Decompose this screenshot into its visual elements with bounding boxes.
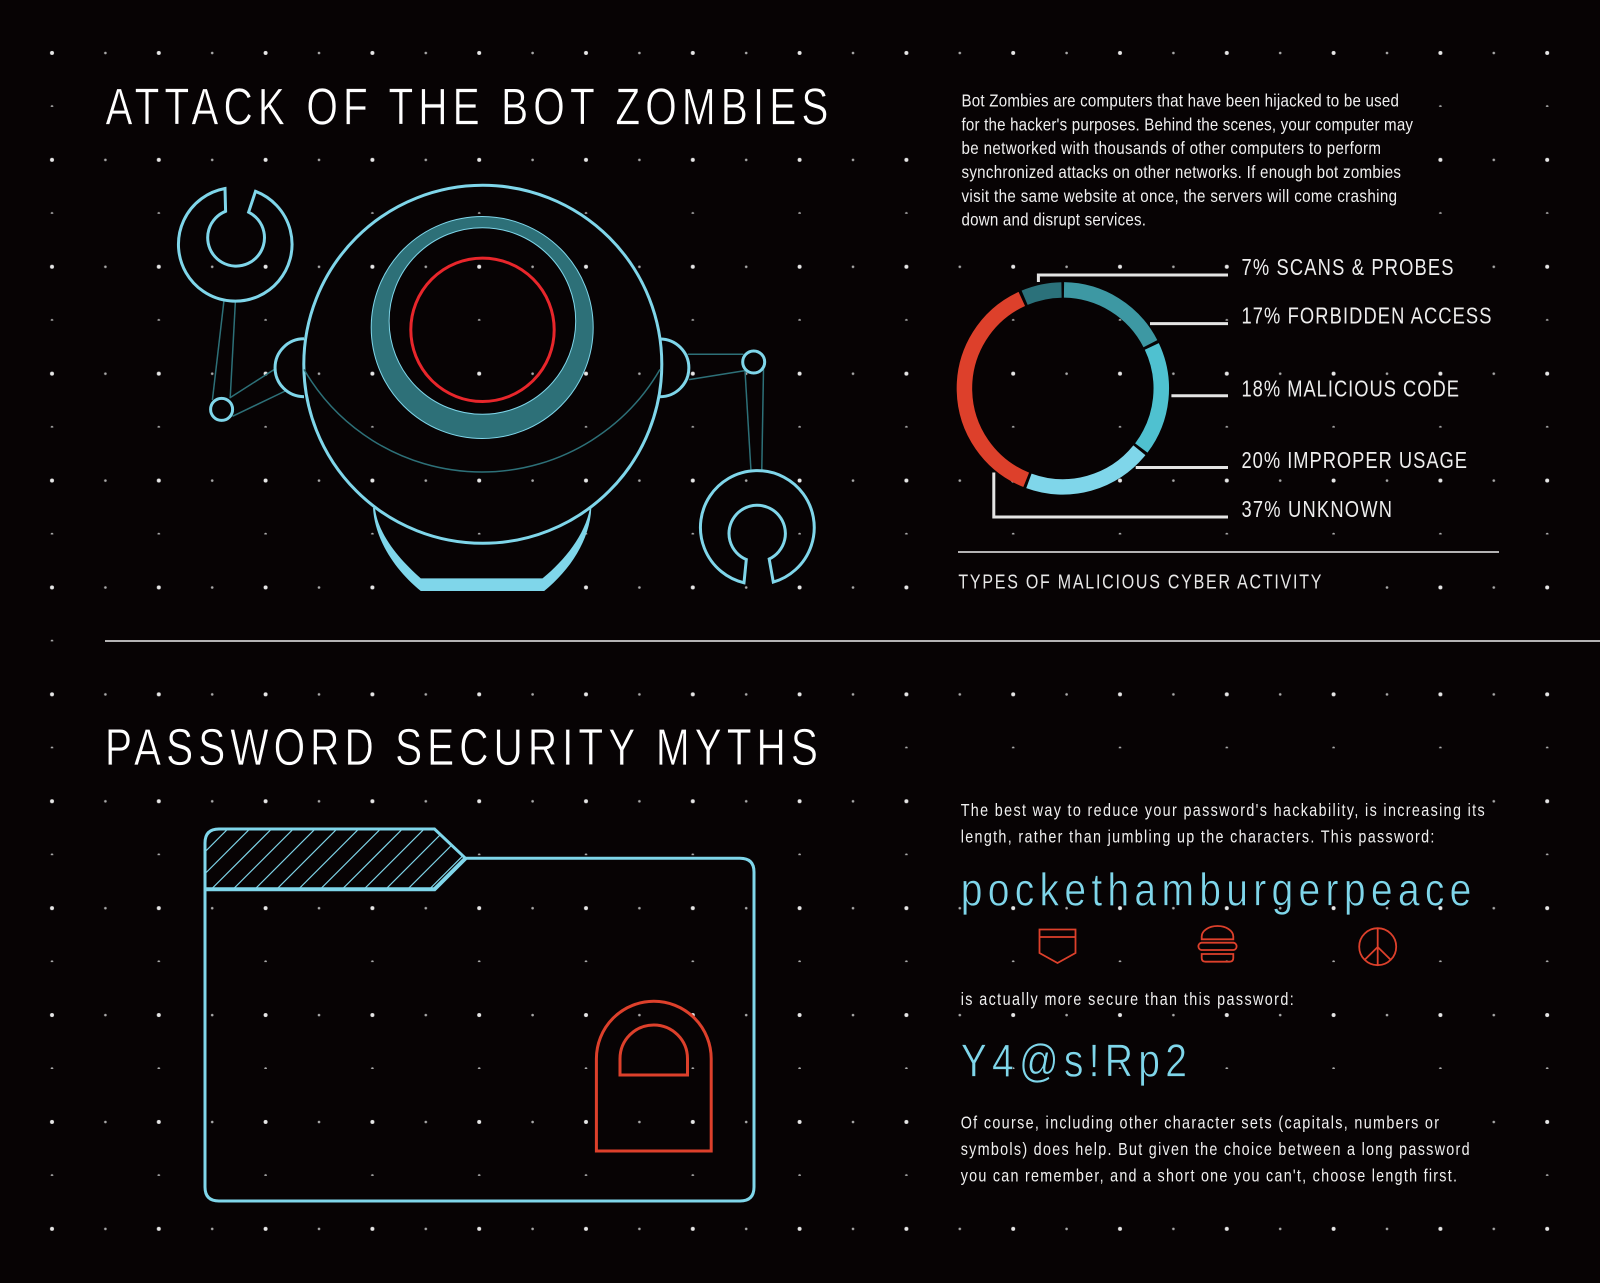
text: reduce hackability: length, rather than jumbling up the characters. This password: — [961, 828, 1434, 847]
left ear — [275, 339, 304, 397]
top-left claw — [178, 188, 292, 301]
donut chart: types of malicious cyber activity — [964, 290, 1161, 487]
head outline — [304, 185, 662, 543]
title: attack of the bot zombies: ATTACK OF THE BOT ZOMBIES — [106, 78, 828, 136]
segment: 18% malicious code — [1141, 346, 1161, 448]
segment: 37% unknown — [964, 299, 1026, 480]
text: choose length first: symbols) does help. But given the choice between a long password — [961, 1141, 1470, 1159]
illustration: folder with lock — [168, 829, 754, 1201]
bottom-right claw — [700, 471, 814, 583]
text: choose length first: you can remember, and a short one you can't, choose length first. — [961, 1167, 1457, 1186]
short password: Y4@s!Rp2 — [961, 1036, 1187, 1087]
chart labels: 17% FORBIDDEN ACCESS — [1242, 304, 1491, 329]
icons row — [1040, 926, 1396, 965]
chart labels: 7% SCANS & PROBES — [1242, 255, 1454, 281]
description: bot zombies: synchronized attacks on other networks. If enough bot zombies — [962, 162, 1401, 182]
description: bot zombies: be networked with thousands of other computers to perform — [962, 138, 1381, 158]
leader lines — [994, 275, 1228, 517]
long password: pockethamburgerpeace — [961, 864, 1471, 916]
description: bot zombies: Bot Zombies are computers that have been hijacked to be used — [962, 90, 1399, 111]
segment: 17% forbidden access — [1064, 290, 1150, 344]
folder outline — [205, 829, 754, 1201]
chart caption: TYPES OF MALICIOUS CYBER ACTIVITY — [958, 570, 1321, 593]
description: bot zombies — [962, 90, 1414, 230]
chart labels: 18% MALICIOUS CODE — [1242, 376, 1459, 402]
robot base — [373, 508, 591, 591]
left arm links — [212, 301, 285, 416]
chin arc — [304, 369, 660, 472]
chart rule — [958, 551, 1499, 553]
text: reduce hackability: The best way to reduce your password's hackability, is increasing its — [961, 802, 1485, 820]
right arm links — [688, 354, 764, 469]
chart labels: 37% UNKNOWN — [1242, 497, 1392, 523]
illustration: bot zombie robot — [178, 185, 814, 591]
text: reduce hackability — [961, 802, 1485, 847]
chart labels: 20% IMPROPER USAGE — [1242, 448, 1467, 474]
chart labels — [1242, 255, 1491, 523]
section divider — [105, 640, 1600, 642]
padlock — [596, 1001, 711, 1151]
eye pupil — [411, 258, 554, 401]
title: password security myths: PASSWORD SECURITY MYTHS — [105, 718, 818, 776]
icon: peace sign — [1359, 928, 1396, 965]
icon: pocket — [1040, 930, 1076, 963]
icon: hamburger — [1198, 926, 1237, 962]
segment: 20% improper usage — [1029, 450, 1139, 487]
text: more secure than: is actually more secure than this password: — [961, 991, 1294, 1009]
right ear — [660, 339, 689, 397]
right joint — [743, 351, 765, 373]
folder tab — [206, 830, 467, 892]
description: bot zombies: visit the same website at once, the servers will come crashing — [962, 186, 1397, 206]
text: choose length first: Of course, including other character sets (capitals, numbers or — [961, 1114, 1440, 1133]
eye ring — [371, 216, 593, 438]
segment: 7% scans and probes — [1025, 290, 1062, 298]
left joint — [211, 398, 233, 420]
text: choose length first — [961, 1114, 1470, 1186]
description: bot zombies: for the hacker's purposes. Behind the scenes, your computer may — [962, 114, 1414, 135]
description: bot zombies: down and disrupt services. — [962, 209, 1146, 230]
